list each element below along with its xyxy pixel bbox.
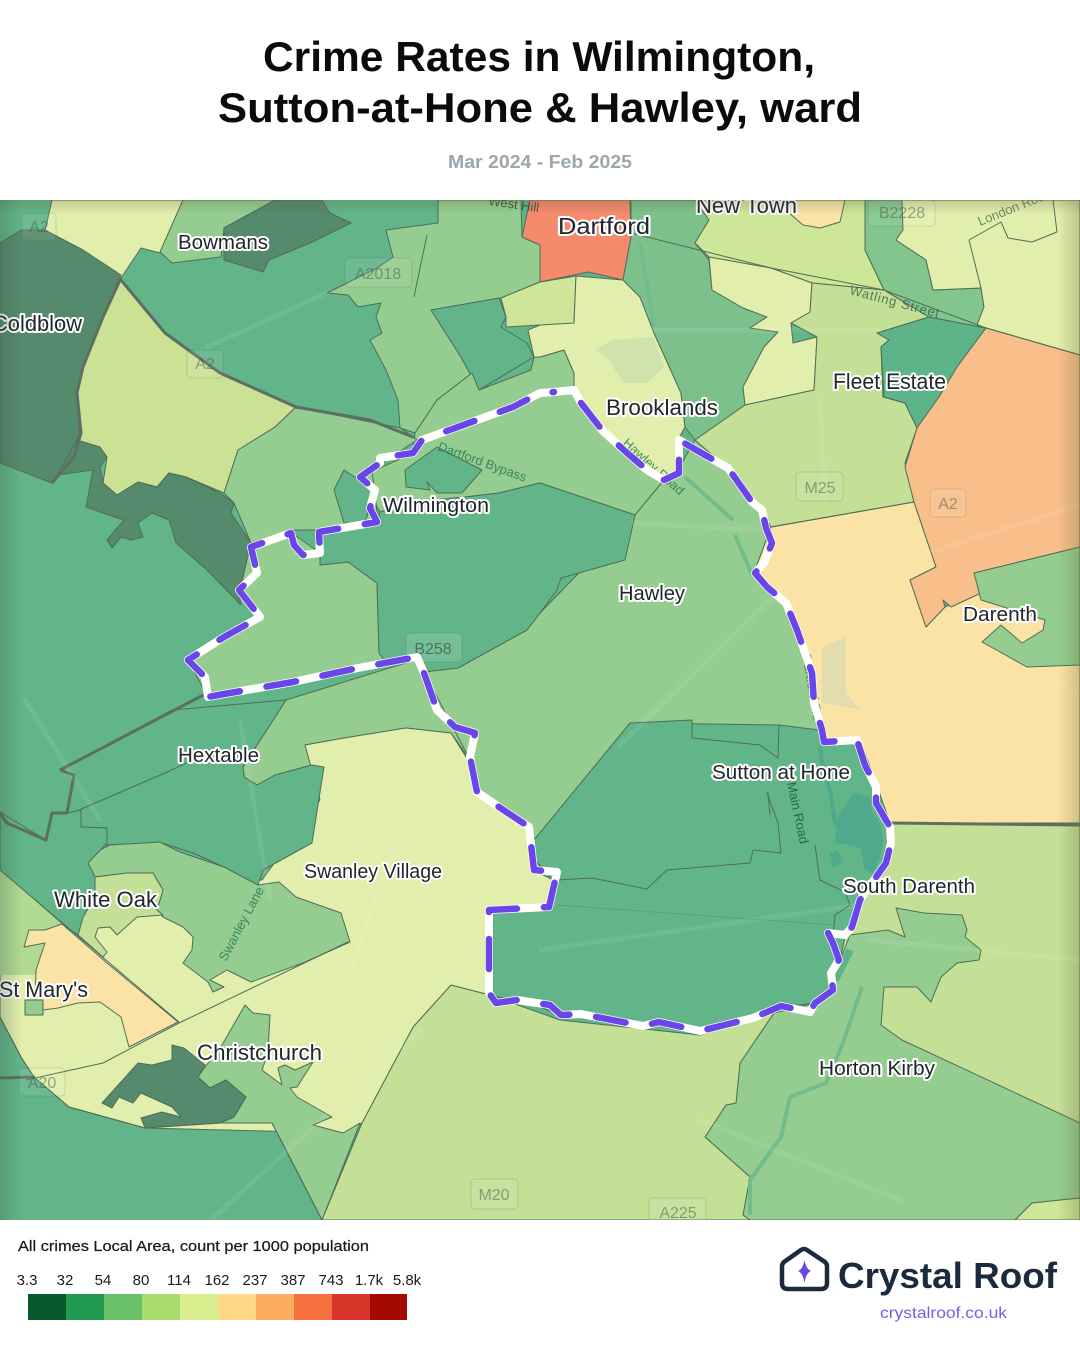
legend colour scale: 387 bbox=[280, 1272, 306, 1289]
brand url: crystalroof.co.uk bbox=[880, 1305, 1008, 1322]
street labels: London Road bbox=[976, 186, 1054, 229]
north-east regions bbox=[595, 200, 1080, 823]
faint roads bbox=[25, 293, 1080, 1230]
legend colour scale: 3.3 bbox=[17, 1272, 37, 1289]
place labels: Wilmington bbox=[383, 495, 489, 517]
brand name: Crystal Roof bbox=[838, 1255, 1058, 1296]
road shields: B2228 bbox=[879, 205, 925, 222]
road shields: A2018 bbox=[355, 266, 401, 283]
place labels: Fleet Estate bbox=[833, 369, 946, 394]
legend colour scale: 54 bbox=[95, 1272, 111, 1289]
place labels: Sutton at Hone bbox=[712, 762, 850, 784]
street labels: Main Road bbox=[784, 781, 812, 845]
place labels: Christchurch bbox=[197, 1040, 322, 1065]
legend colour scale: 5.8k bbox=[393, 1272, 422, 1289]
title: Sutton-at-Hone & Hawley, ward bbox=[218, 84, 862, 131]
road shields: A2 bbox=[938, 496, 958, 513]
title: Crime Rates in Wilmington, bbox=[263, 33, 815, 80]
icon: Crystal Roof house logo bbox=[782, 1249, 827, 1289]
legend colour scale: 237 bbox=[242, 1272, 268, 1289]
road shields: M20 bbox=[478, 1187, 510, 1204]
place labels: St Mary's bbox=[0, 977, 88, 1002]
road shields: A2 bbox=[29, 219, 49, 236]
place labels: South Darenth bbox=[843, 876, 975, 898]
ward boundary: dashed purple on white bbox=[188, 390, 891, 1031]
street labels: Dartford Bypass bbox=[436, 439, 529, 485]
street labels: Dartford Rd bbox=[799, 653, 825, 722]
place labels: Dartford bbox=[558, 213, 650, 239]
legend colour scale: 80 bbox=[133, 1272, 149, 1289]
place labels: White Oak bbox=[54, 887, 158, 912]
legend colour scale bbox=[17, 1272, 422, 1320]
choropleth map bbox=[0, 186, 1080, 1230]
water patches and rivers bbox=[640, 243, 883, 1215]
street labels: West Hill bbox=[488, 193, 540, 215]
Dartford red region bbox=[522, 200, 631, 282]
map regions bbox=[0, 200, 820, 840]
place labels: Swanley Village bbox=[304, 861, 442, 883]
road shields: M25 bbox=[804, 480, 836, 497]
date range subtitle: Mar 2024 - Feb 2025 bbox=[448, 152, 632, 172]
place labels: Hawley bbox=[619, 583, 685, 605]
street labels bbox=[215, 186, 1054, 963]
title bbox=[218, 33, 862, 131]
legend colour scale: 743 bbox=[318, 1272, 344, 1289]
place labels: Bowmans bbox=[178, 232, 268, 254]
legend colour scale: 32 bbox=[57, 1272, 73, 1289]
place labels: Horton Kirby bbox=[819, 1058, 935, 1080]
Sutton at Hone region bbox=[488, 720, 893, 1030]
place labels: New Town bbox=[696, 193, 797, 218]
south-east regions bbox=[322, 823, 1080, 1220]
road shields: A225 bbox=[659, 1205, 697, 1222]
road shields bbox=[19, 200, 966, 1228]
legend colour scale: 114 bbox=[167, 1272, 191, 1289]
legend title: All crimes Local Area, count per 1000 population bbox=[18, 1238, 369, 1255]
road shields: B258 bbox=[414, 641, 452, 658]
legend colour scale: 1.7k bbox=[355, 1272, 384, 1289]
place labels: Darenth bbox=[963, 604, 1037, 626]
place labels: Hextable bbox=[178, 745, 259, 767]
street labels: Swanley Lane bbox=[215, 884, 267, 963]
south-west pale regions bbox=[0, 700, 553, 1220]
street labels: Watling Street bbox=[848, 282, 941, 321]
legend colour scale: 162 bbox=[204, 1272, 230, 1289]
road shields: A20 bbox=[28, 1075, 56, 1092]
street labels: Hawley Road bbox=[620, 435, 687, 498]
boundary lines bbox=[0, 233, 1080, 1220]
place labels: Brooklands bbox=[606, 395, 718, 420]
place labels bbox=[0, 193, 1037, 1080]
road shields: A2 bbox=[195, 356, 215, 373]
